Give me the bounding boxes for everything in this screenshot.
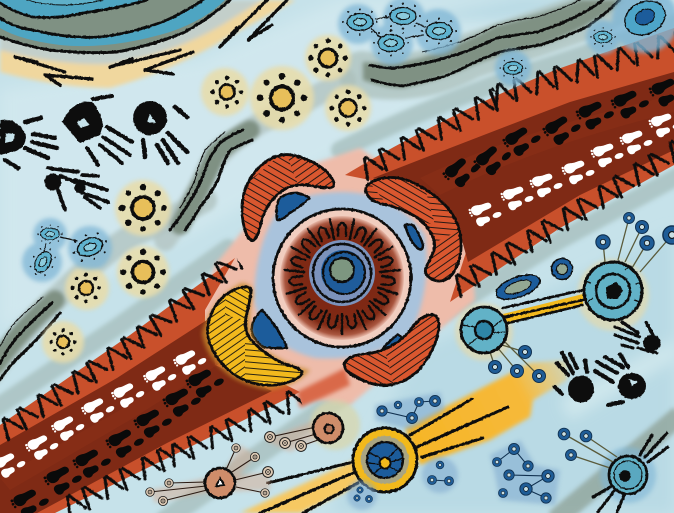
hand three (133, 101, 187, 163)
boomerang top right (364, 176, 462, 282)
yellow dotted circles (42, 35, 371, 363)
black footprints upper right (441, 73, 674, 192)
river line work (0, 0, 287, 85)
river: top left arcs (0, 0, 296, 88)
blue corner shapes (252, 193, 423, 351)
pale grey river path left (0, 80, 345, 375)
hand four (44, 168, 108, 210)
blue network left (22, 218, 112, 282)
brown ring circles bottom (146, 400, 360, 506)
blue circles top right (495, 0, 674, 86)
hand one (0, 118, 57, 168)
hand prints upper left (0, 96, 187, 210)
blue ovals right (493, 258, 572, 304)
dark band lower left (0, 318, 272, 513)
teal circle bottom right (555, 415, 674, 513)
hand prints lower right (555, 322, 661, 405)
radial zigzag (284, 219, 400, 334)
pink meeting ground (195, 148, 475, 405)
black footprints lower left (9, 363, 226, 513)
orange beam and ochre waterhole (240, 360, 567, 513)
yellow-linked teal circles right (455, 212, 674, 382)
hand a (555, 353, 594, 402)
white footprints lower left (0, 345, 209, 481)
central waterhole (254, 192, 427, 359)
hand c (615, 322, 661, 353)
boomerang bottom left yellow (200, 280, 310, 390)
hand two (62, 96, 132, 165)
blue network top (338, 0, 461, 65)
river: top right wave (362, 0, 640, 88)
boomerang top left (240, 152, 336, 242)
hand b (595, 354, 646, 405)
orange band upper right (345, 28, 674, 302)
dark band upper right (373, 72, 674, 262)
wavy river lines left (0, 130, 252, 380)
orange band lower left (0, 258, 300, 513)
boomerang bottom right (342, 312, 440, 388)
pale blue ring (254, 192, 427, 359)
white footprints upper right (467, 109, 674, 229)
blue node networks bottom (347, 392, 560, 510)
